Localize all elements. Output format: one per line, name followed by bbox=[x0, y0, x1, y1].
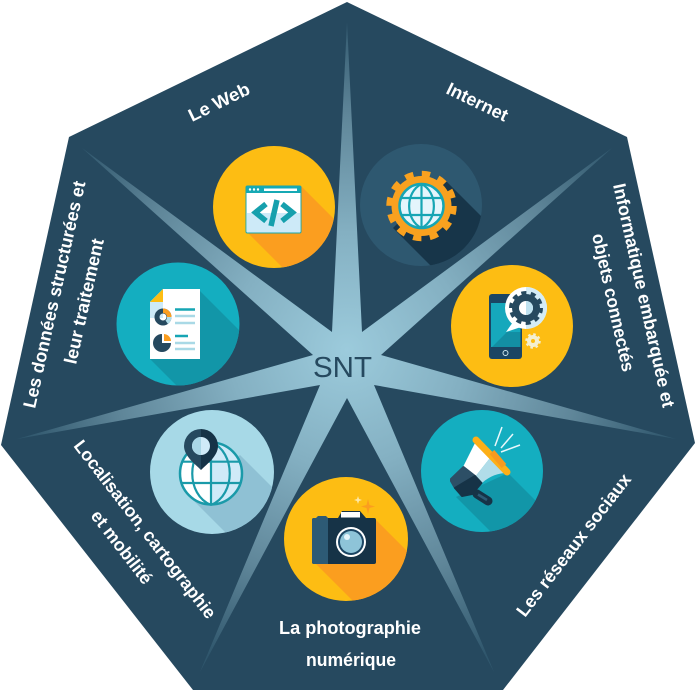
label: leur traitement: leur traitement bbox=[60, 237, 108, 366]
icon: web browser code window bbox=[213, 146, 335, 268]
label: Les données structurées et: Les données structurées et bbox=[19, 179, 90, 410]
label: Localisation, cartographie: Localisation, cartographie bbox=[70, 436, 220, 623]
icon: document with charts bbox=[116, 262, 240, 386]
label: La photographie: La photographie bbox=[279, 618, 421, 638]
icon: smartphone with gears bbox=[451, 265, 573, 387]
label: objets connectés: objets connectés bbox=[588, 232, 638, 373]
icon: globe with map pin bbox=[150, 410, 274, 534]
icon: megaphone bbox=[421, 410, 543, 532]
center label SNT: SNT bbox=[313, 352, 372, 384]
icon: internet gear globe bbox=[360, 144, 482, 266]
label: Internet: Internet bbox=[443, 79, 511, 125]
label: Le Web: Le Web bbox=[185, 79, 253, 126]
label: Informatique embarquée et: Informatique embarquée et bbox=[609, 182, 679, 409]
label: Les réseaux sociaux: Les réseaux sociaux bbox=[512, 470, 635, 620]
icon: camera bbox=[284, 477, 408, 601]
label: numérique: numérique bbox=[306, 650, 396, 670]
label: et mobilité: et mobilité bbox=[87, 506, 156, 588]
